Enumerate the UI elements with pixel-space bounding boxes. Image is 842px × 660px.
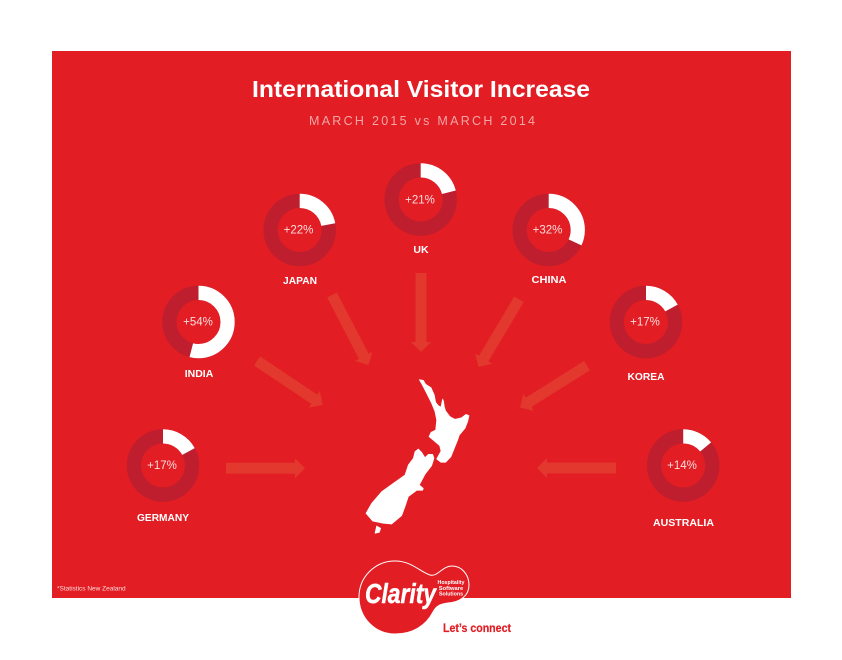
donut: Korea (617, 293, 675, 383)
donut: India: +54% (183, 316, 213, 328)
North Island (419, 380, 469, 462)
donut: Japan: JAPAN (283, 275, 317, 287)
donut: Australia: AUSTRALIA (653, 517, 714, 529)
arrow: Korea to NZ (515, 357, 592, 416)
arrow: Australia to NZ (537, 458, 616, 478)
donut: Korea: +17% (630, 316, 660, 328)
map: New Zealand (366, 380, 469, 533)
logo: Clarity: Clarity (365, 578, 437, 609)
donut: China: CHINA (532, 274, 567, 286)
donut: UK: UK (413, 244, 429, 256)
donut: China (520, 201, 578, 286)
arrow: Germany to NZ (226, 458, 305, 478)
donut: India: INDIA (185, 368, 214, 380)
arrow: Japan to NZ (323, 290, 377, 370)
arrow: India to NZ (251, 353, 328, 413)
arrow: UK to NZ (411, 273, 431, 352)
footnote: *Statistics New Zealand (57, 586, 126, 592)
logo: Clarity: Hospitality (438, 580, 465, 586)
donut: Japan: +22% (284, 224, 313, 236)
tagline: Let’s connect (443, 623, 511, 635)
donut: UK: +21% (405, 194, 435, 206)
subtitle: MARCH 2015 vs MARCH 2014 (309, 114, 535, 128)
donut: Germany (134, 436, 192, 524)
donut: Japan (271, 201, 329, 287)
donut: India (169, 293, 228, 380)
logo: Clarity (359, 561, 469, 634)
donut: Germany: +17% (147, 460, 177, 472)
donut: China: +32% (533, 224, 562, 236)
donut: Korea: KOREA (628, 371, 665, 383)
donut: Australia: +14% (667, 460, 697, 472)
donut: UK (392, 170, 450, 256)
donut: Germany: GERMANY (137, 512, 189, 524)
logo: Clarity: Software (439, 586, 464, 592)
red background panel (52, 51, 791, 598)
Stewart Island (375, 526, 381, 533)
South Island (366, 449, 434, 524)
arrow: China to NZ (470, 294, 528, 372)
logo: Clarity: Solutions (439, 592, 463, 598)
donut: Australia (653, 436, 714, 529)
title: International Visitor Increase (252, 76, 590, 102)
